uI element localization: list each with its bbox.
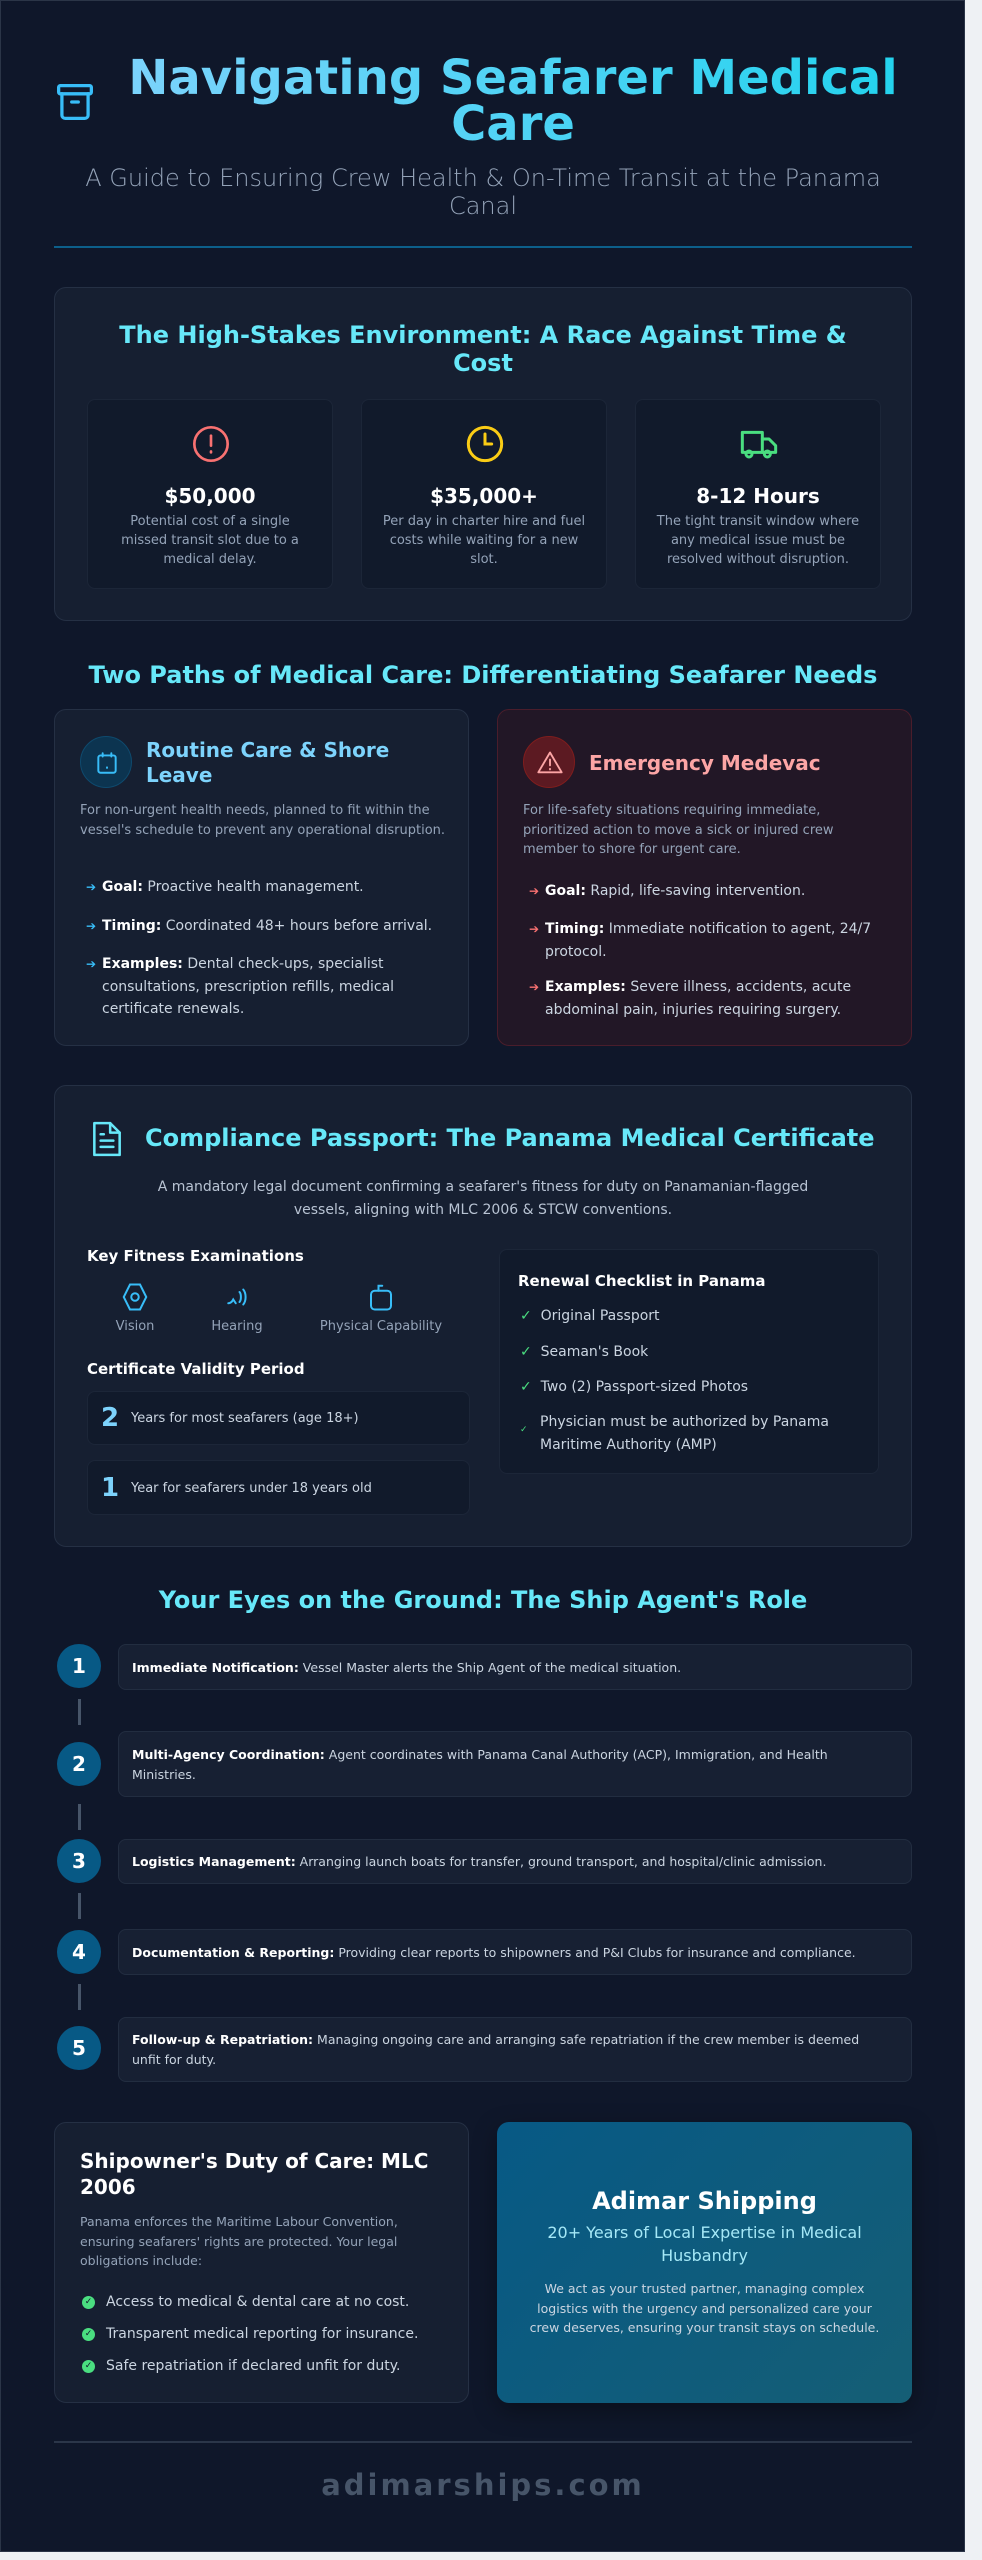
panel: routine care: ➔ xyxy=(86,957,96,971)
subtitle: Canal xyxy=(449,192,517,220)
stat card: $50,000 xyxy=(87,399,333,589)
panel: compliance passport xyxy=(54,1085,912,1547)
panel: routine care: Goal: Proactive health management. xyxy=(102,879,364,895)
stat card: 8-12 hours: The tight transit window where xyxy=(657,514,859,529)
description: A mandatory legal document confirming a seafarer's fitness for duty on Panamanian-flagged xyxy=(158,1179,808,1195)
heading: validity: Certificate Validity Period xyxy=(87,1360,305,1378)
description: member to shore for urgent care. xyxy=(523,842,741,857)
icon: clock xyxy=(466,426,504,462)
description: For non-urgent health needs, planned to fit within the xyxy=(80,803,430,818)
list: emergency xyxy=(529,883,871,1018)
icon: vision: Vision xyxy=(116,1319,154,1334)
title: Navigating Seafarer Medical Care xyxy=(128,50,898,152)
panel: emergency medevac: Examples: Severe illness, accidents, acute xyxy=(545,979,851,995)
step 2: Ministries. xyxy=(132,1766,196,1782)
panel: adimar shipping: We act as your trusted partner, managing complex xyxy=(545,2281,864,2296)
panel: routine care xyxy=(54,709,469,1046)
panel: emergency medevac: Timing: Immediate notification to agent, 24/7 xyxy=(545,921,871,937)
panel: shipowner duty of care: ✓ xyxy=(85,2361,92,2371)
stat card: 8-12 hours: resolved without disruption. xyxy=(667,552,849,567)
description: prioritized action to move a sick or injured crew xyxy=(523,822,834,838)
subtitle: A Guide to Ensuring Crew Health & On-Time Transit at the Panama xyxy=(85,164,881,192)
panel: routine care: Examples: Dental check-ups, specialist xyxy=(102,956,384,972)
panel: shipowner duty of care: Access to medical & dental care at no cost. xyxy=(106,2294,409,2310)
stat card: 8-12 hours xyxy=(635,399,881,589)
step 5 xyxy=(57,2017,912,2082)
panel: shipowner duty of care: Shipowner's Duty of Care: MLC xyxy=(80,2149,428,2173)
title: compliance: Compliance Passport: The Panama Medical Certificate xyxy=(145,1124,875,1152)
step 3 xyxy=(57,1839,912,1884)
stat card: $50,000: missed transit slot due to a xyxy=(121,533,299,548)
panel: shipowner duty of care: Transparent medical reporting for insurance. xyxy=(106,2326,418,2342)
renewal checklist: ✓ xyxy=(520,1425,528,1435)
icon: hearing xyxy=(211,1288,263,1334)
panel: shipowner duty of care: Safe repatriation if declared unfit for duty. xyxy=(106,2358,400,2374)
panel: adimar shipping xyxy=(497,2122,912,2403)
renewal checklist: ✓ Seaman's Book xyxy=(520,1344,648,1360)
panel: adimar shipping: 20+ Years of Local Expertise in Medical xyxy=(547,2223,862,2242)
step 4: Documentation & Reporting: Providing clear reports to shipowners and P&I Clubs for insurance and compliance. xyxy=(132,1945,856,1960)
title: emergency: Emergency Medevac xyxy=(589,751,821,775)
description xyxy=(523,803,834,857)
step 2 xyxy=(57,1731,912,1797)
stat card: $35,000+: costs while waiting for a new xyxy=(390,533,578,548)
renewal checklist: Renewal Checklist in Panama xyxy=(518,1272,766,1290)
renewal checklist: ✓ Original Passport xyxy=(520,1308,660,1324)
panel: shipowner duty of care: obligations include: xyxy=(80,2253,202,2268)
validity: 2 years xyxy=(87,1391,470,1445)
icon: warning circle xyxy=(523,736,575,788)
panel: shipowner duty of care xyxy=(54,2122,469,2403)
step 4 xyxy=(57,1929,912,1975)
step 4: 4 xyxy=(72,1940,86,1964)
heading: high stakes xyxy=(119,321,847,377)
validity: 1 year: Year for seafarers under 18 years old xyxy=(131,1481,372,1496)
icon: alert circle xyxy=(193,426,229,462)
validity: 2 years: Years for most seafarers (age 18+) xyxy=(131,1411,359,1426)
stat card: 8-12 hours: 8-12 Hours xyxy=(696,484,820,508)
panel: routine care: ➔ xyxy=(86,880,96,894)
renewal checklist: Maritime Authority (AMP) xyxy=(540,1437,717,1453)
panel: emergency medevac: Goal: Rapid, life-saving intervention. xyxy=(545,883,805,899)
panel: adimar shipping: logistics with the urgency and personalized care your xyxy=(537,2300,872,2316)
description: vessel's schedule to prevent any operational disruption. xyxy=(80,823,445,838)
description xyxy=(158,1179,808,1218)
panel: shipowner duty of care: ensuring seafarers' rights are protected. Your legal xyxy=(80,2234,397,2248)
list: routine xyxy=(86,879,432,1017)
panel: routine care: Timing: Coordinated 48+ hours before arrival. xyxy=(102,918,432,934)
step 1: 1 xyxy=(72,1654,86,1678)
title: routine care: Routine Care & Shore xyxy=(146,738,389,762)
stat card: $50,000: Potential cost of a single xyxy=(130,514,290,529)
icon: document xyxy=(93,1122,121,1156)
validity: 1 year xyxy=(87,1460,470,1515)
stat card: $50,000: medical delay. xyxy=(163,552,257,567)
panel: routine care: certificate renewals. xyxy=(102,1001,244,1017)
step 2: 2 xyxy=(72,1752,86,1776)
validity: 2 years: 2 xyxy=(101,1403,119,1433)
heading: ship agent role: Your Eyes on the Ground: The Ship Agent's Role xyxy=(159,1586,807,1614)
panel: emergency medevac: ➔ xyxy=(529,980,539,994)
stat card: 8-12 hours: any medical issue must be xyxy=(671,533,845,548)
step 3: 3 xyxy=(72,1849,86,1873)
panel: adimar shipping: Adimar Shipping xyxy=(592,2187,817,2215)
subtitle xyxy=(85,164,881,220)
description: vessels, aligning with MLC 2006 & STCW conventions. xyxy=(294,1202,672,1218)
validity: 1 year: 1 xyxy=(101,1473,119,1503)
step 2: Multi-Agency Coordination: Agent coordinates with Panama Canal Authority (ACP), Immigration, and Health xyxy=(132,1747,828,1762)
step 5: Follow-up & Repatriation: Managing ongoing care and arranging safe repatriation if the crew member is deemed xyxy=(132,2032,859,2047)
title: routine care: Leave xyxy=(146,763,212,787)
panel: shipowner duty of care: ✓ xyxy=(85,2297,92,2307)
renewal checklist: Physician must be authorized by Panama xyxy=(540,1414,829,1430)
stat card: $35,000+: $35,000+ xyxy=(430,484,538,508)
step 3: Logistics Management: Arranging launch boats for transfer, ground transport, and hospital/clinic admission. xyxy=(132,1854,826,1869)
panel: routine care: consultations, prescription refills, medical xyxy=(102,978,394,994)
stat card: $35,000+: slot. xyxy=(470,552,498,567)
heading: key fitness: Key Fitness Examinations xyxy=(87,1247,304,1265)
heading: high stakes: Cost xyxy=(453,349,513,377)
icon: physical xyxy=(320,1284,442,1334)
footer: website: adimarships.com xyxy=(321,2468,645,2502)
stat card: $35,000+ xyxy=(361,399,607,589)
panel: adimar shipping: Husbandry xyxy=(661,2246,748,2265)
panel: emergency medevac: protocol. xyxy=(545,944,607,960)
heading: high stakes: The High-Stakes Environment: A Race Against Time & xyxy=(119,321,847,349)
stat card: $50,000: $50,000 xyxy=(164,484,256,508)
description: For life-safety situations requiring immediate, xyxy=(523,803,820,818)
panel: adimar shipping: crew deserves, ensuring your transit stays on schedule. xyxy=(530,2320,879,2335)
icon: truck xyxy=(740,430,778,458)
icon: physical: Physical Capability xyxy=(320,1319,442,1334)
icon: hearing: Hearing xyxy=(211,1319,263,1334)
heading: two paths: Two Paths of Medical Care: Differentiating Seafarer Needs xyxy=(89,661,877,689)
step 5: unfit for duty. xyxy=(132,2052,216,2067)
icon: vision xyxy=(116,1284,154,1334)
renewal checklist xyxy=(499,1249,879,1474)
description xyxy=(80,803,445,838)
panel: emergency medevac: ➔ xyxy=(529,884,539,898)
renewal checklist: ✓ Two (2) Passport-sized Photos xyxy=(520,1379,748,1395)
icon: archive xyxy=(57,84,93,120)
panel: emergency medevac xyxy=(497,709,912,1046)
icon: calendar circle xyxy=(80,736,132,788)
panel: shipowner duty of care: ✓ xyxy=(85,2329,92,2339)
panel: emergency medevac: abdominal pain, injuries requiring surgery. xyxy=(545,1002,841,1018)
checklist: obligations xyxy=(82,2294,418,2374)
step 1: Immediate Notification: Vessel Master alerts the Ship Agent of the medical situation. xyxy=(132,1660,681,1675)
step 1 xyxy=(57,1644,912,1690)
panel: high-stakes environment xyxy=(54,287,912,621)
step 5: 5 xyxy=(72,2036,86,2060)
panel: shipowner duty of care: Panama enforces the Maritime Labour Convention, xyxy=(80,2214,398,2229)
timeline: ship agent steps xyxy=(57,1644,912,2082)
title: routine care xyxy=(146,738,389,787)
panel: emergency medevac: ➔ xyxy=(529,922,539,936)
panel: shipowner duty of care: 2006 xyxy=(80,2175,136,2199)
stat card: $35,000+: Per day in charter hire and fuel xyxy=(383,514,585,529)
panel: routine care: ➔ xyxy=(86,919,96,933)
